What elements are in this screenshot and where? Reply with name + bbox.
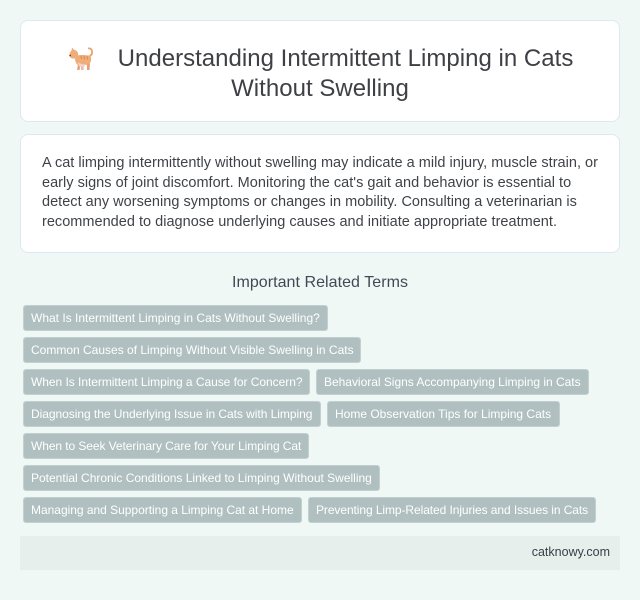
summary paragraph: recommended to diagnose underlying causes and initiate appropriate treatment. [42,214,557,230]
tag 10 [308,497,596,523]
tag 8 [23,465,380,491]
tag 7 [23,433,309,459]
tag 6: Home Observation Tips for Limping Cats [335,407,551,421]
summary paragraph: early signs of joint discomfort. Monitoring the cat's gait and behavior is essential to [42,175,571,191]
tag 8: Potential Chronic Conditions Linked to Limping Without Swelling [31,471,372,485]
tag 1: What Is Intermittent Limping in Cats Without Swelling? [31,311,320,325]
tag 4 [316,369,589,395]
tag 2 [23,337,361,363]
summary paragraph: A cat limping intermittently without swelling may indicate a mild injury, muscle strain, or [42,155,598,171]
heading: related terms: Important Related Terms [232,274,408,291]
tag 4: Behavioral Signs Accompanying Limping in Cats [324,375,581,389]
title: Understanding Intermittent Limping in Cats [118,45,573,72]
tag 10: Preventing Limp-Related Injuries and Issues in Cats [316,503,588,517]
summary paragraph [42,155,598,230]
tag 9 [23,497,302,523]
footer bar [20,536,620,570]
title: Without Swelling [231,75,409,102]
tag 1 [23,305,328,331]
list: related term tags [23,305,596,523]
footer site name: catknowy.com [532,545,610,559]
tag 7: When to Seek Veterinary Care for Your Limping Cat [31,439,301,453]
icon: cat [69,48,93,70]
tag 9: Managing and Supporting a Limping Cat at Home [31,503,294,517]
tag 5: Diagnosing the Underlying Issue in Cats with Limping [31,407,312,421]
tag 2: Common Causes of Limping Without Visible Swelling in Cats [31,343,354,357]
panel: summary text [20,134,620,253]
title [118,45,573,102]
panel: title card [20,20,620,122]
tag 3 [23,369,310,395]
tag 6 [327,401,560,427]
summary paragraph: detect any worsening symptoms or changes in mobility. Consulting a veterinarian is [42,194,577,210]
tag 5 [23,401,321,427]
tag 3: When Is Intermittent Limping a Cause for Concern? [31,375,303,389]
